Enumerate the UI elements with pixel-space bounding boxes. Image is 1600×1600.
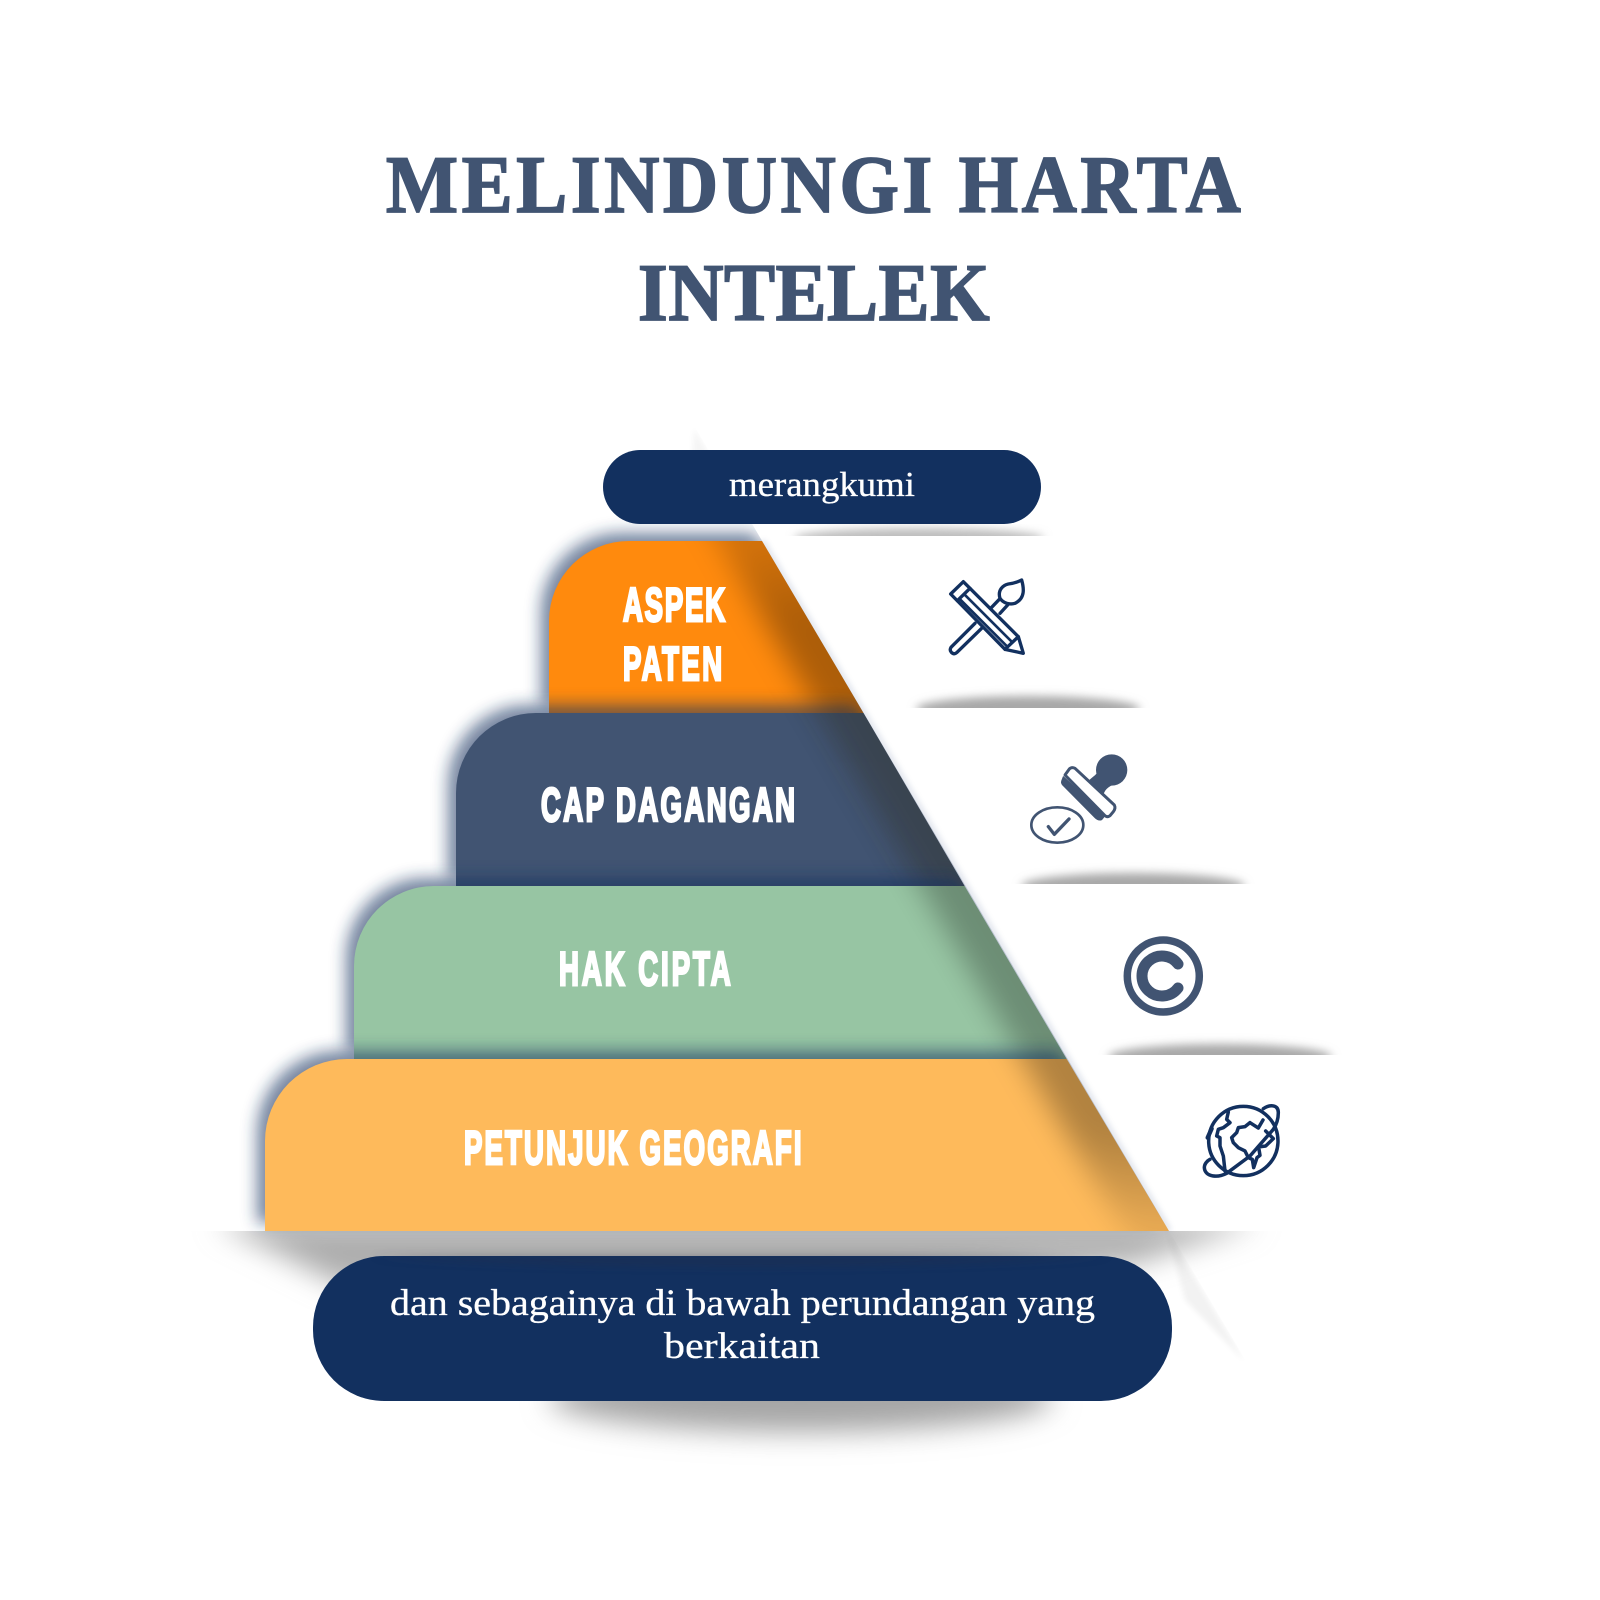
tier: cap dagangan bbox=[436, 693, 964, 886]
title: MELINDUNGI HARTA bbox=[386, 140, 1241, 231]
pill: dan sebagainya bbox=[313, 1256, 1172, 1401]
icon: pencil and brush bbox=[950, 580, 1023, 654]
pill: dan sebagainya: dan sebagainya di bawah perundangan yang bbox=[390, 1283, 1095, 1324]
icon: stamp bbox=[1031, 754, 1127, 843]
top wedge shadow bbox=[695, 440, 704, 450]
title bbox=[386, 140, 1241, 339]
tier: aspek paten: PATEN bbox=[623, 638, 722, 691]
tier: aspek paten bbox=[529, 521, 864, 713]
row shadows behind the white steps bbox=[794, 528, 1332, 1070]
tier: hak cipta: HAK CIPTA bbox=[559, 943, 731, 996]
tier: petunjuk geografi: PETUNJUK GEOGRAFI bbox=[464, 1122, 802, 1175]
shadow below pyramid bbox=[220, 1231, 1250, 1294]
tier: petunjuk geografi bbox=[245, 1039, 1169, 1234]
tier: cap dagangan: CAP DAGANGAN bbox=[541, 779, 795, 832]
tier: hak cipta bbox=[334, 866, 1067, 1059]
hypotenuse glow bbox=[762, 541, 1169, 1231]
tier: aspek paten: ASPEK bbox=[623, 579, 725, 632]
pill: merangkumi: merangkumi bbox=[729, 465, 915, 504]
icon: globe bbox=[1204, 1106, 1278, 1176]
icon: copyright bbox=[1127, 940, 1199, 1012]
shadow under bottom pill bbox=[540, 1401, 1062, 1450]
title: INTELEK bbox=[638, 248, 990, 339]
pill: merangkumi bbox=[603, 450, 1041, 524]
pill: dan sebagainya: berkaitan bbox=[664, 1326, 820, 1367]
bottom wedge shadow bbox=[1175, 1251, 1232, 1344]
